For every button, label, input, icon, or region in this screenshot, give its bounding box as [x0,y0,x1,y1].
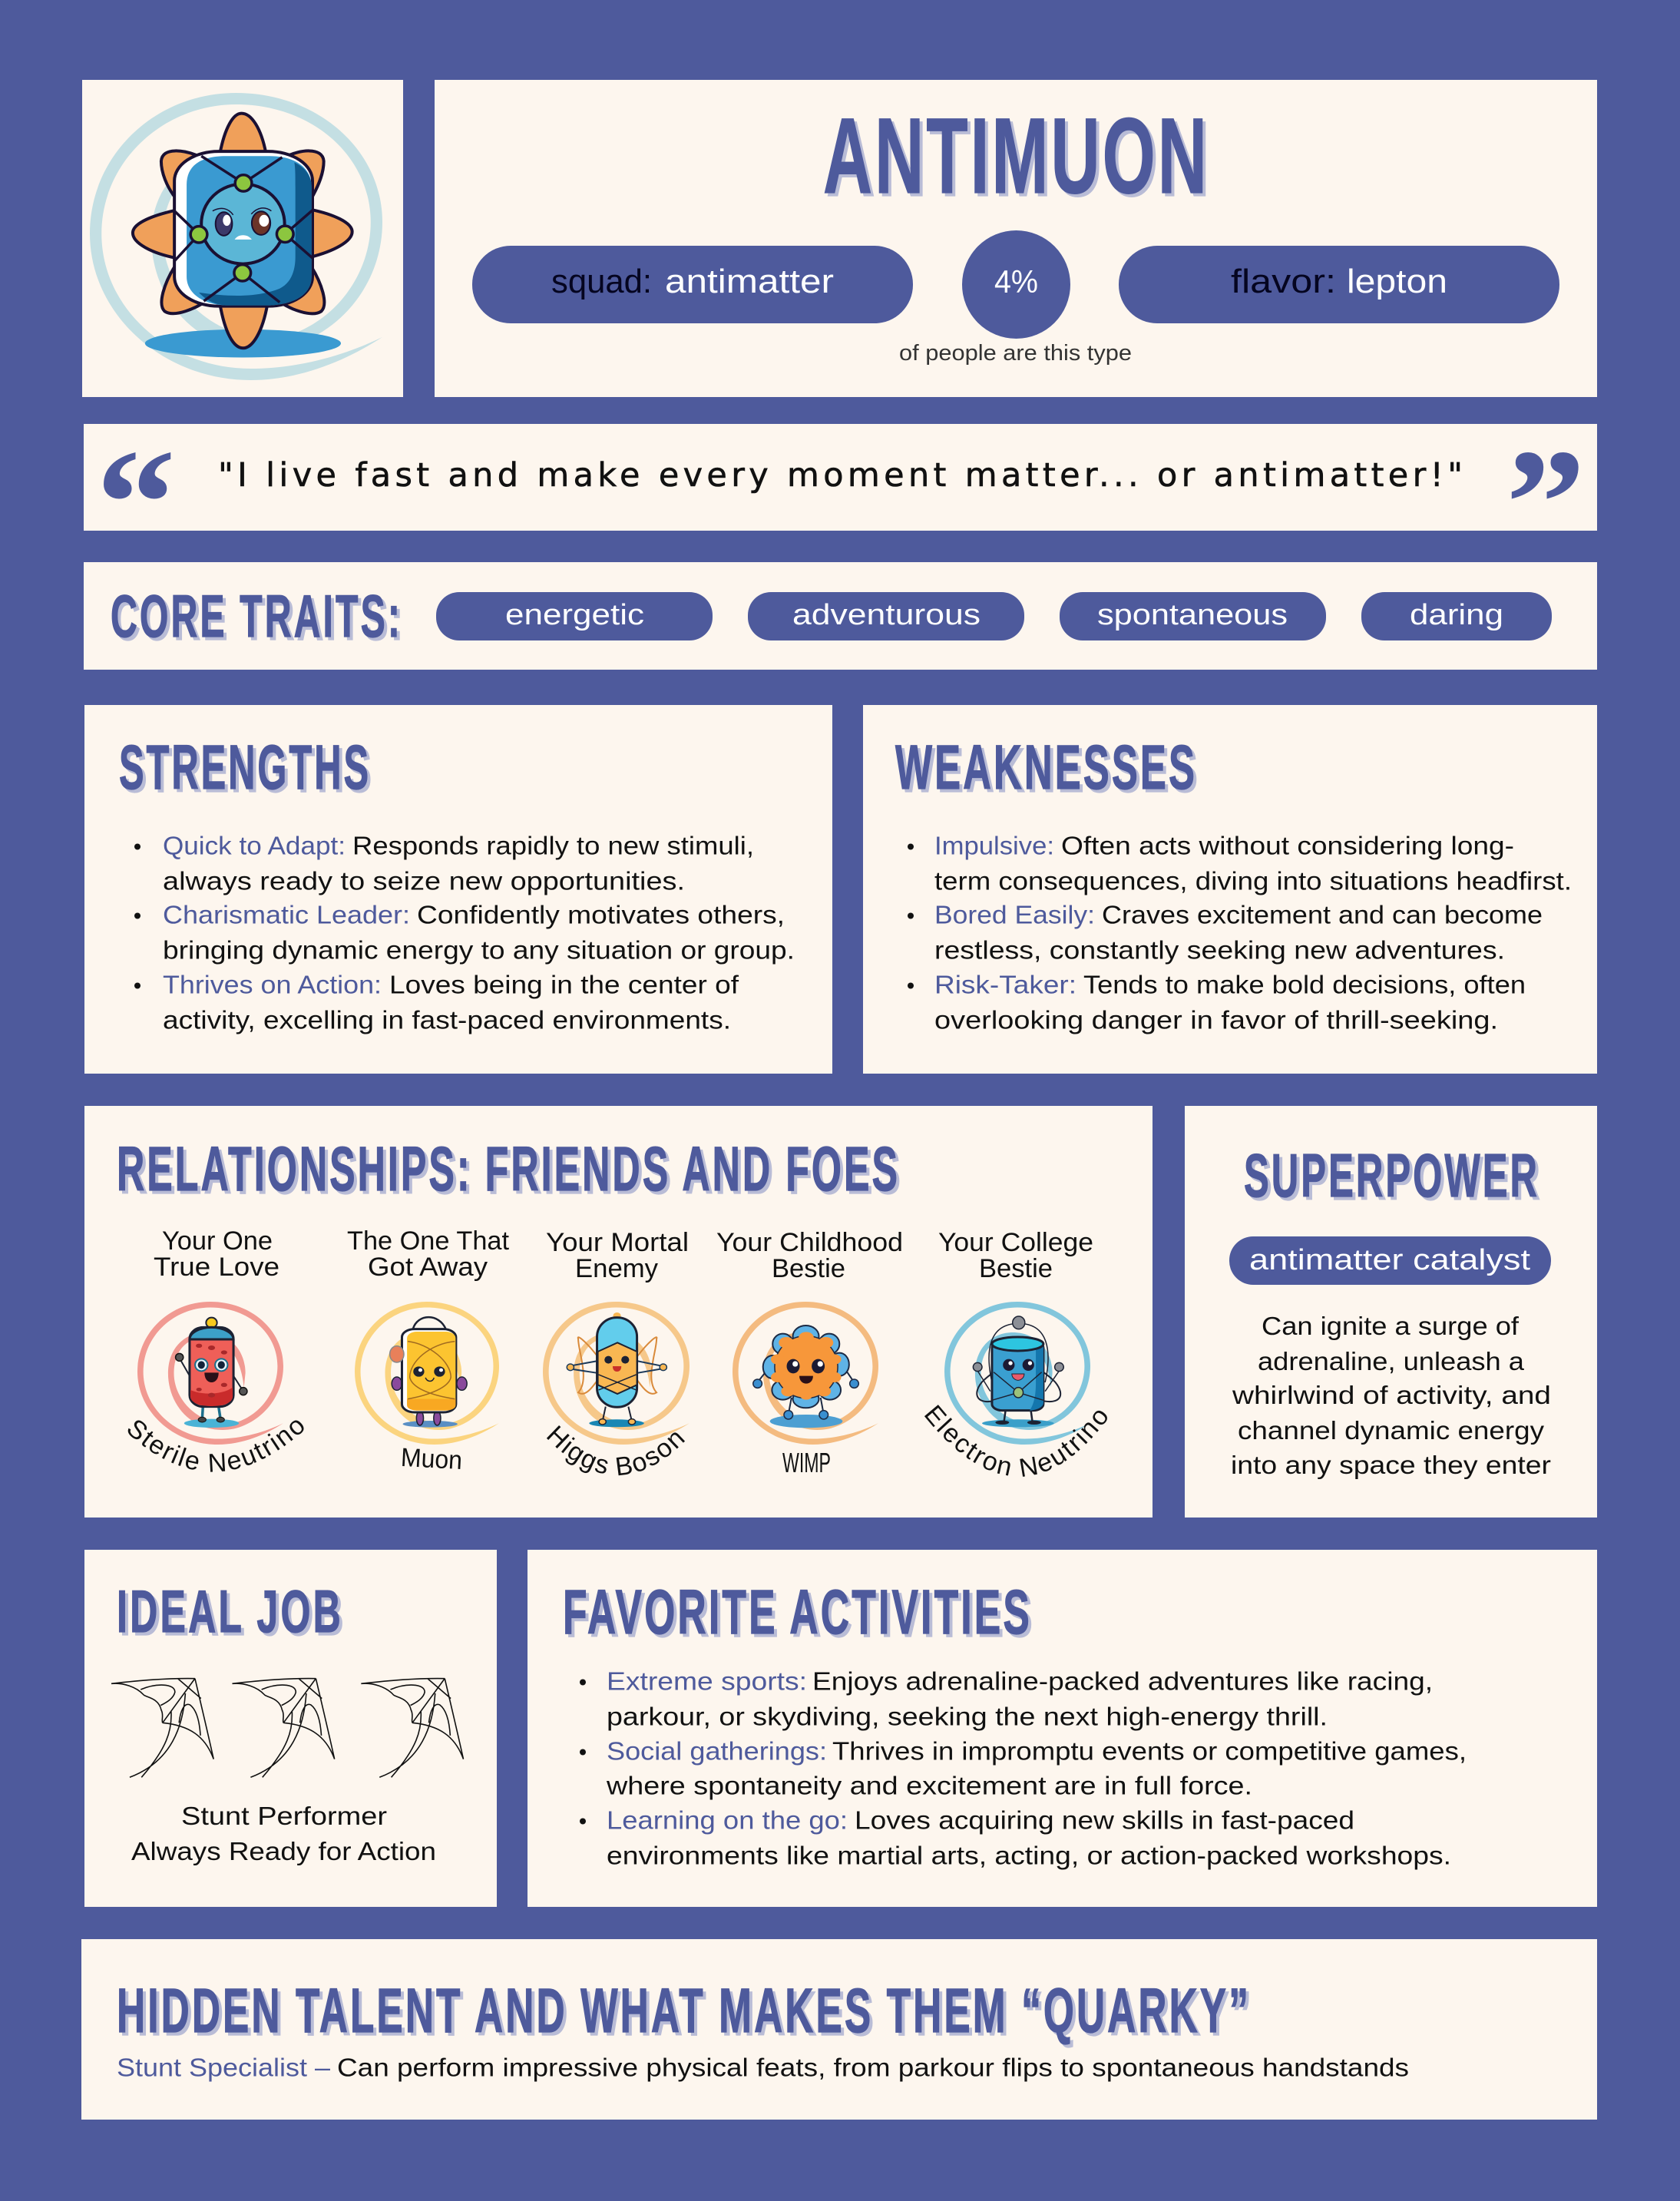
relationship: higgs boson: Enemy [575,1254,658,1283]
relationship: wimp: Your Childhood [716,1228,903,1257]
job description: Stunt Performer [181,1802,387,1830]
heading: CORE TRAITS: [111,582,402,650]
pill: squad: antimatter [665,263,834,300]
talent description: Stunt Specialist – [117,2054,331,2081]
bullet list: Enjoys adrenaline-packed adventures like racing, [812,1666,1433,1696]
label: sterile neutrino: Sterile Neutrino [127,1421,304,1472]
bullet list: Quick to Adapt: [163,831,346,860]
quote text: "I live fast and make every moment matter... or antimatter!" [218,456,1463,495]
job description: Always Ready for Action [131,1837,436,1865]
bullet list: Extreme sports: [607,1666,807,1696]
bullet list: Tends to make bold decisions, often [1083,971,1526,998]
trait pill: adventurous: adventurous [792,599,981,631]
pill: flavor: lepton [1347,263,1447,300]
bullet list: Thrives in impromptu events or competitive games, [832,1737,1467,1765]
icon: muon [355,1302,499,1445]
relationship: wimp [716,1228,903,1478]
panel: strengths [84,705,832,1074]
pill: flavor: flavor: [1231,263,1336,300]
panel: weaknesses [863,705,1597,1074]
bullet list: Risk-Taker: [934,971,1076,998]
relationship: electron neutrino [924,1228,1107,1477]
bullet list: term consequences, diving into situations headfirst. [934,866,1572,895]
relationship: higgs boson [543,1228,690,1476]
pill: superpower name [1229,1236,1551,1285]
panel: hidden talent [81,1939,1597,2120]
panel: core traits [84,562,1597,670]
superpower description [1231,1312,1551,1479]
heading: STRENGTHS [119,733,371,803]
trait pill: energetic [436,592,713,640]
relationship: higgs boson: Your Mortal [546,1228,689,1257]
bullet list: activity, excelling in fast-paced environments. [163,1006,731,1034]
bullet list: Thrives on Action: [163,971,382,998]
superpower description: channel dynamic energy [1238,1416,1545,1445]
pill: squad: squad: [551,263,652,300]
bullet list: Confidently motivates others, [417,900,785,929]
panel: ideal job [84,1550,497,1907]
heading: IDEAL JOB [117,1577,343,1645]
icon: wimp [733,1302,878,1445]
bullet list: Social gatherings: [607,1737,827,1765]
bullet list: Loves being in the center of [389,971,739,998]
trait pill: spontaneous: spontaneous [1097,599,1288,631]
caption: of people are this type [899,341,1132,366]
icon: sterile neutrino [137,1302,283,1445]
bullet list: environments like martial arts, acting, or action-packed workshops. [607,1842,1451,1869]
bullet list: where spontaneity and excitement are in full force. [606,1771,1252,1800]
panel: title [435,80,1597,397]
bullet list: always ready to seize new opportunities. [163,866,685,895]
heading: RELATIONSHIPS: FRIENDS AND FOES [117,1134,900,1204]
bullet list: restless, constantly seeking new adventures. [934,935,1505,965]
bullet list: Responds rapidly to new stimuli, [352,831,754,860]
label: muon: Muon [400,1443,463,1475]
bullet list: Loves acquiring new skills in fast-paced [855,1806,1354,1834]
heading: FAVORITE ACTIVITIES [563,1577,1032,1647]
bullet list: Often acts without considering long- [1061,831,1514,860]
relationship: electron neutrino: Your College [938,1228,1093,1257]
trait pill: daring: daring [1410,599,1503,631]
trait pill: daring [1361,592,1552,640]
label: wimp: WIMP [782,1447,831,1478]
icon: electron neutrino [944,1302,1090,1445]
trait pill: spontaneous [1060,592,1326,640]
bullet list [134,831,795,1034]
pill: squad [472,246,913,323]
relationship: sterile neutrino [127,1226,304,1472]
bullet list: overlooking danger in favor of thrill-seeking. [934,1006,1498,1034]
panel: favorite activities [527,1550,1597,1907]
relationship: sterile neutrino: Your One [162,1226,273,1256]
title: ANTIMUON [823,95,1209,216]
pill: superpower name: antimatter catalyst [1249,1244,1531,1276]
trait pill: energetic: energetic [505,599,644,631]
talent description: Can perform impressive physical feats, from parkour flips to spontaneous handstands [337,2054,1409,2081]
bullet list [908,831,1572,1034]
bullet list: Charismatic Leader: [163,900,410,929]
bullet list: Impulsive: [934,831,1054,860]
panel: superpower [1185,1106,1597,1518]
relationship: sterile neutrino: True Love [154,1253,279,1282]
superpower description: adrenaline, unleash a [1258,1347,1525,1375]
panel: relationships [84,1106,1153,1518]
bullet list: Craves excitement and can become [1102,900,1543,929]
superpower description: whirlwind of activity, and [1232,1381,1551,1409]
bullet list: parkour, or skydiving, seeking the next high-energy thrill. [607,1702,1328,1731]
panel: character portrait [82,80,403,397]
bullet list: Bored Easily: [934,900,1095,929]
label: higgs boson: Higgs Boson [547,1425,685,1476]
icon: antimuon character [90,93,382,380]
relationship: wimp: Bestie [772,1254,845,1283]
trait pill: adventurous [748,592,1024,640]
superpower description: into any space they enter [1231,1451,1551,1479]
pill: flavor [1119,246,1559,323]
relationship: electron neutrino: Bestie [979,1254,1053,1283]
bullet list: bringing dynamic energy to any situation or group. [163,935,795,965]
relationship: muon [347,1226,510,1475]
stat: 4 percent: 4% [994,263,1038,300]
stat: 4 percent [962,230,1070,339]
bullet list [580,1666,1467,1869]
panel: quote [84,419,1597,588]
heading: WEAKNESSES [895,733,1197,803]
relationship: muon: The One That [347,1226,510,1256]
label: electron neutrino: Electron Neutrino [924,1405,1107,1477]
icon: closing quote mark: ” [1506,419,1586,588]
icon: opening quote mark: “ [96,419,176,588]
superpower description: Can ignite a surge of [1262,1312,1520,1340]
icon: higgs boson [543,1302,690,1445]
relationship: muon: Got Away [368,1253,488,1282]
job description [131,1802,436,1865]
bullet list: Learning on the go: [607,1806,848,1834]
icon: stunt kites [111,1679,464,1777]
